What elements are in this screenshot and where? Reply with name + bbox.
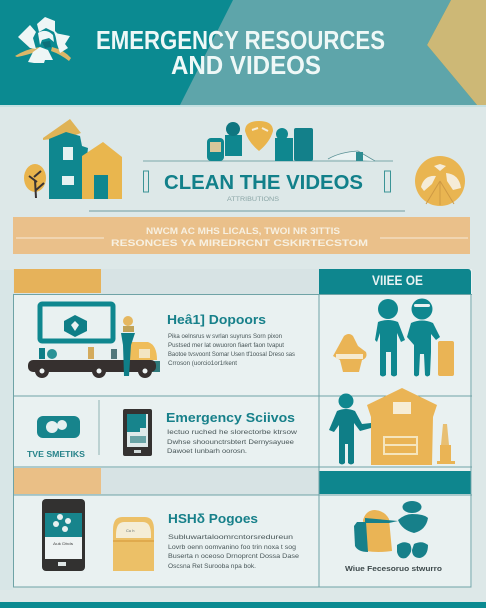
icon: yellow folder — [113, 517, 154, 571]
subtitle: clean the videos: CLEAN THE VIDEOS — [164, 172, 363, 194]
text block: hsr pages: Lovrb oenn oomvanino foo trin noxa t sog — [168, 545, 296, 551]
subtitle: clean the videos — [89, 171, 405, 211]
icon: yellow folder: Cu h — [126, 528, 134, 533]
icon: orange circle — [415, 156, 465, 206]
text block: hsr pages — [168, 511, 300, 570]
banner: orange description: NWCM AC MHS LICALS, TWOI NR 3ITTIS — [146, 226, 340, 236]
text block: hsr pages: Buserta n oceoso Drnoprcnt Dossa Dase — [168, 554, 300, 560]
text block: health dept: Heâ1] Dopoors — [167, 312, 266, 327]
icon: teal badge and label — [27, 416, 85, 459]
banner: orange description — [13, 217, 470, 254]
text block: health dept: Pika oelnsrus w svrlan suyruns Sorn pixon — [168, 334, 282, 340]
icon: tablet — [123, 409, 152, 456]
text block: hsr pages: Oscsna Ret Surooba npa bok. — [168, 564, 256, 570]
icon: phone — [42, 499, 85, 571]
footer bar — [0, 602, 486, 608]
text block: hsr pages: HSHδ Pogoes — [168, 511, 258, 526]
text block: emergency services — [166, 410, 298, 455]
title — [96, 25, 385, 80]
icon: supplies and figure — [345, 501, 442, 573]
icon: person with house and candle — [329, 388, 455, 465]
title: AND VIDEOS — [171, 50, 321, 80]
icon: header emblem — [15, 17, 71, 63]
text block: health dept: Pustsed mer lat owuoron fiaert faon tvaput — [168, 343, 284, 349]
text block: health dept: Baotoe tvsvoont Somar Usen tf1oosal Dreso sas — [168, 352, 295, 358]
banner: orange description: RESONCES YA MIREDRCNT CSKIRTECSTOM — [111, 238, 368, 249]
text block: health dept — [167, 312, 295, 367]
title: EMERGENCY RESOURCES — [96, 25, 385, 55]
icon: houses and tree — [24, 119, 122, 199]
icon: teal badge and label: TVE SMETIKS — [27, 449, 85, 459]
subtitle: clean the videos: ATTRIBUTIONS — [227, 197, 279, 203]
icon: truck — [28, 304, 160, 378]
text block: health dept: Crroson (uorcio1or1rkent — [168, 361, 237, 367]
icon: skyline of supplies — [143, 121, 393, 161]
text block: emergency services: Dwhse shoounctrsbtert Dernysayuee — [167, 440, 295, 446]
text block: emergency services: Dawoet Iunbarh oorosn. — [167, 449, 247, 455]
icon: two people and supplies — [333, 298, 454, 376]
icon: phone: Auk Dbds — [53, 541, 73, 546]
text block: hsr pages: Subluwartaloomrcntorsredureun — [168, 535, 293, 541]
icon: supplies and figure: Wiue Fecesoruo stwurro — [345, 566, 442, 573]
video label: VIIEE OE — [372, 272, 423, 288]
panel: resources table — [13, 269, 472, 587]
text block: emergency services: Emergency Sciivos — [166, 410, 295, 425]
header banner — [0, 0, 486, 107]
text block: emergency services: Iectuo ruched he slorectorbe ktrsow — [167, 430, 298, 436]
